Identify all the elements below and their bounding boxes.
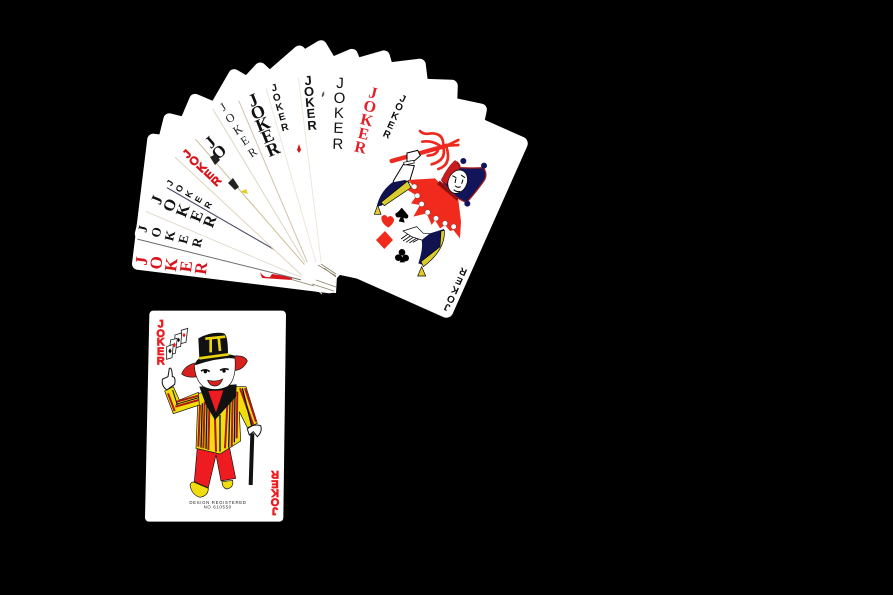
card 4: small black joker index: J (164, 178, 176, 188)
raised hand (162, 368, 175, 390)
lower sleeve (418, 229, 444, 265)
bottom joker index: R (271, 468, 279, 480)
lower hand and arm (403, 227, 438, 241)
card 1: red joker index: J (132, 255, 152, 266)
front card index top: K (389, 110, 401, 124)
jacket stripes (198, 388, 256, 452)
front card index bottom: R (457, 264, 469, 277)
front card with jester (325, 84, 530, 320)
striped fan in lower hand (402, 214, 438, 244)
red cape (408, 178, 461, 238)
hat emblem (199, 337, 229, 358)
diamond (376, 231, 393, 249)
card 3: black joker index (142, 92, 381, 290)
bottom joker index: O (270, 495, 279, 507)
front card index bottom: O (445, 292, 457, 305)
jacket body (196, 387, 257, 454)
bottom joker index: J (272, 505, 278, 517)
card 9: small bold joker index: O (272, 92, 282, 104)
card 4: small black joker index: O (173, 183, 186, 194)
card 11: thin black joker index: R (332, 136, 344, 153)
card 11: thin black joker index: E (333, 120, 344, 137)
card 11: thin black joker index: K (334, 105, 344, 122)
card 7: thin serif joker index (211, 38, 424, 274)
shoes (190, 482, 208, 497)
card 9: small bold joker index (265, 49, 442, 274)
pants (194, 442, 236, 488)
card 6: outlined joker index with figure fragment (193, 43, 429, 285)
card 10: bold black joker index: E (306, 105, 316, 121)
upper bell (374, 205, 381, 214)
card 5: red joker index: J (180, 147, 194, 161)
hat (442, 161, 486, 202)
card 1: red joker index: E (176, 260, 196, 273)
card 2: black joker index: O (148, 226, 165, 239)
spade (395, 208, 408, 223)
card 10: bold black joker index: K (305, 94, 316, 110)
card 6: outlined joker index with figure fragment: O (208, 141, 230, 164)
card 10: bold black joker index: O (303, 84, 315, 99)
neck collar (438, 182, 458, 199)
single joker card (149, 315, 282, 518)
top joker index: J (158, 319, 164, 331)
card 11: thin black joker index: O (333, 90, 346, 107)
card 12: red joker index: E (356, 125, 371, 144)
lower bell (418, 267, 426, 276)
card body (149, 315, 282, 518)
single joker card: NO 610550 (204, 505, 232, 510)
top joker index: O (156, 328, 165, 340)
sceptre (392, 131, 458, 169)
card 7: thin serif joker index: K (230, 121, 245, 138)
card 4: small black joker index (164, 67, 401, 283)
card 9: small bold joker index: J (270, 82, 278, 94)
design registered text: DESIGN REGISTERED (189, 500, 247, 505)
card 2: black joker index: J (134, 223, 151, 234)
card 9: small bold joker index: E (278, 111, 287, 124)
top joker index: E (157, 346, 164, 358)
cape balls (412, 184, 456, 229)
card 2: black joker index: E (175, 233, 192, 245)
card 1: red joker index: O (146, 255, 167, 270)
front card index bottom: K (449, 282, 461, 296)
card 7: thin serif joker index: R (245, 144, 260, 160)
card 1: red joker index: R (191, 260, 211, 276)
front card index bottom: J (443, 300, 452, 313)
right hand (247, 425, 261, 437)
card 1: red joker index: K (161, 256, 182, 272)
card 10: bold black joker index: J (304, 73, 312, 88)
mouth (208, 379, 223, 386)
bottom joker index: K (271, 487, 279, 499)
raised hand (407, 150, 420, 162)
card 8: large black joker index: J (245, 89, 261, 111)
cane (251, 433, 252, 485)
top hat (196, 333, 235, 365)
card 2: black joker index: K (161, 228, 178, 242)
card 4: small black joker index: K (183, 188, 195, 199)
card 5: red joker index (172, 60, 410, 294)
card 7: thin serif joker index: O (223, 109, 238, 126)
left sleeve (165, 387, 199, 414)
card 8: large black joker index: O (248, 100, 268, 124)
dark card edges at the fan base (290, 264, 336, 291)
jester illustration (374, 131, 487, 276)
card 10: bold black joker index: R (307, 117, 318, 133)
card 11: thin black joker index (323, 75, 458, 277)
front card index top: R (381, 129, 393, 142)
mini playing cards (167, 328, 188, 359)
heart (381, 215, 394, 228)
face (444, 167, 471, 196)
card 12: red joker index (322, 78, 488, 298)
top joker index: R (157, 355, 165, 367)
card 3: black joker index: K (173, 201, 194, 220)
card 3: black joker index: O (160, 196, 181, 214)
card 11: thin black joker index: J (336, 75, 344, 92)
shirt and tie (208, 390, 223, 412)
front card index top: O (393, 101, 405, 114)
card 4: small black joker index: E (193, 194, 204, 205)
card 8: large black joker index: R (263, 137, 284, 161)
upper sleeve (377, 180, 410, 207)
card 12: red joker index: J (367, 84, 379, 103)
white base of the fan where the cards converge (300, 262, 337, 293)
card 5: red joker index: E (201, 167, 217, 182)
card 3: black joker index: J (148, 193, 167, 207)
top joker index: K (157, 337, 165, 349)
card 9: small bold joker index: K (275, 101, 285, 114)
red hat brim sides (182, 362, 198, 377)
bottom joker index: E (271, 477, 279, 489)
card 5: red joker index: R (208, 173, 225, 189)
upper arm (393, 164, 414, 189)
card 8: large black joker index: K (252, 112, 273, 136)
club (395, 249, 409, 262)
card 8: large black joker index (237, 47, 432, 278)
card 5: red joker index: O (186, 153, 203, 169)
card 5: red joker index: K (194, 159, 210, 176)
collar and lapels (199, 384, 237, 420)
card 9: small bold joker index: R (280, 122, 291, 134)
card 8: large black joker index: E (258, 125, 277, 148)
card 3: black joker index: R (200, 213, 221, 230)
card 6: outlined joker index with figure fragment: J (201, 132, 220, 152)
front card index bottom: E (454, 274, 465, 287)
card 12: red joker index: R (353, 138, 368, 158)
card 2: black joker index: R (188, 235, 205, 249)
card 3: black joker index: E (187, 208, 207, 224)
card 12: red joker index: K (359, 111, 375, 131)
card 4: small black joker index: R (202, 199, 214, 210)
card 2: black joker index (134, 112, 364, 288)
fan of joker cards (131, 38, 530, 320)
card 12: red joker index: O (362, 97, 378, 117)
card 7: thin serif joker index: J (217, 100, 229, 114)
face (194, 357, 235, 389)
card 7: thin serif joker index: E (238, 133, 252, 148)
front card index top: E (385, 119, 396, 132)
card 1: red joker index (131, 133, 351, 294)
front card index top: J (398, 93, 407, 106)
card 10: bold black joker index (298, 58, 449, 269)
